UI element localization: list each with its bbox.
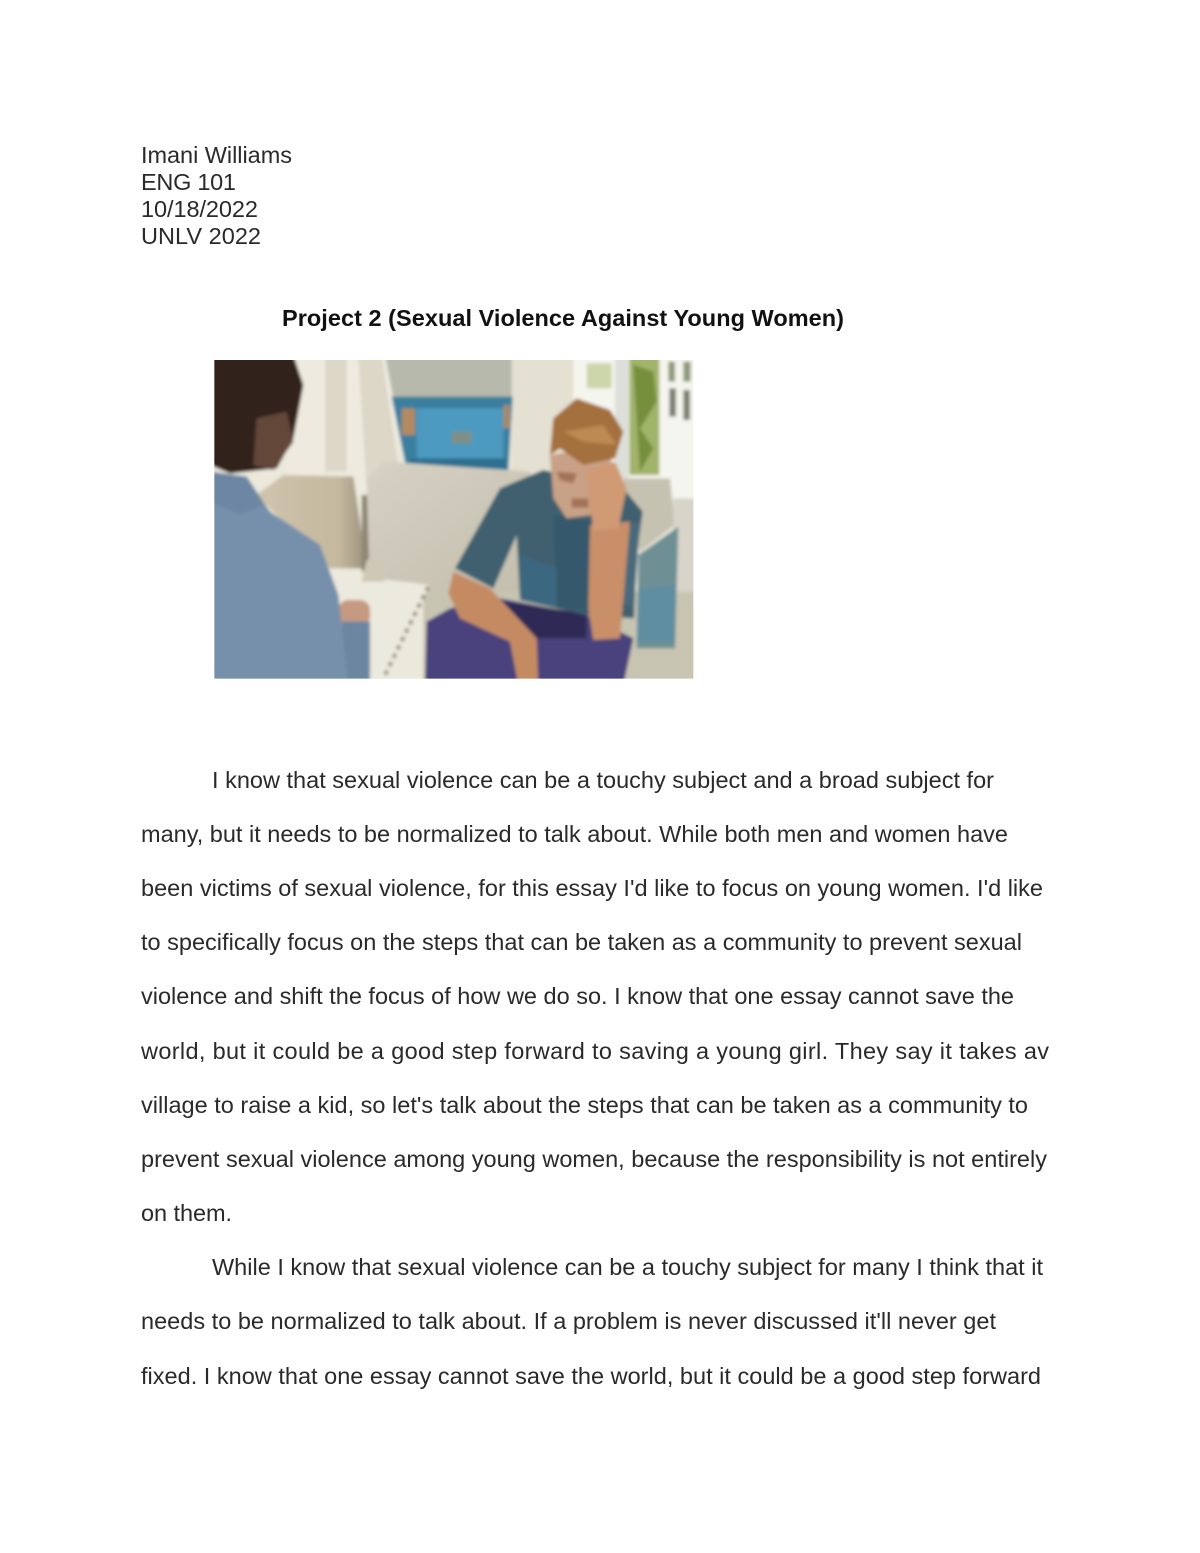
body paragraph 1 <box>140 767 1049 1226</box>
body paragraph 1: been victims of sexual violence, for this essay I'd like to focus on young women. I'd like <box>141 875 1043 901</box>
body paragraph 1: prevent sexual violence among young women, because the responsibility is not entirely <box>141 1146 1047 1172</box>
author header block: UNLV 2022 <box>141 223 261 249</box>
body paragraph 1: village to raise a kid, so let's talk about the steps that can be taken as a community to <box>141 1092 1028 1118</box>
photo: counselling session on a sofa <box>210 355 700 685</box>
body paragraph 1: to specifically focus on the steps that can be taken as a community to prevent sexual <box>141 929 1022 955</box>
body paragraph 1: I know that sexual violence can be a touchy subject and a broad subject for <box>212 767 994 793</box>
title: Project 2 (Sexual Violence Against Young Women) <box>282 305 844 331</box>
body paragraph 2 <box>141 1254 1043 1389</box>
author header block: 10/18/2022 <box>141 196 258 222</box>
body paragraph 1: world, but it could be a good step forward to saving a young girl. They say it takes av <box>140 1038 1049 1064</box>
author header block: ENG 101 <box>141 169 236 195</box>
author header block <box>141 142 292 249</box>
body paragraph 1: violence and shift the focus of how we do so. I know that one essay cannot save the <box>141 983 1014 1009</box>
body paragraph 2: needs to be normalized to talk about. If a problem is never discussed it'll never get <box>141 1308 996 1334</box>
body paragraph 2: fixed. I know that one essay cannot save the world, but it could be a good step forward <box>141 1363 1041 1389</box>
body paragraph 1: many, but it needs to be normalized to talk about. While both men and women have <box>141 821 1008 847</box>
body paragraph 1: on them. <box>141 1200 232 1226</box>
author header block: Imani Williams <box>141 142 292 168</box>
body paragraph 2: While I know that sexual violence can be a touchy subject for many I think that it <box>212 1254 1043 1280</box>
